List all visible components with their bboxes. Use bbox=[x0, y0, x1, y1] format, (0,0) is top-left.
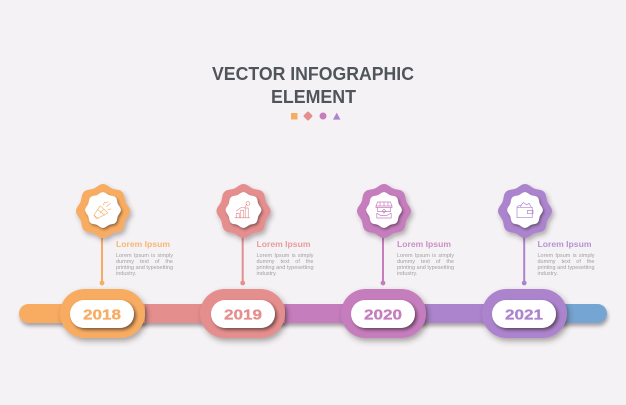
pill 2021: 2021 bbox=[505, 306, 543, 324]
pill 2020 bbox=[341, 289, 426, 338]
icon: growth chart bbox=[235, 202, 250, 218]
body text bbox=[538, 252, 594, 276]
pill 2018: 2018 bbox=[83, 306, 121, 324]
stem and dot bbox=[381, 235, 385, 285]
body text bbox=[256, 252, 314, 276]
bar start: orange bbox=[19, 304, 145, 323]
body text: printing and typesetting bbox=[397, 264, 454, 270]
body text bbox=[397, 252, 454, 276]
body text: industry. bbox=[256, 270, 277, 276]
body text: printing and typesetting bbox=[116, 264, 173, 270]
body text: Lorem Ipsum is simply bbox=[256, 252, 314, 258]
heading: Lorem Ipsum bbox=[538, 239, 591, 249]
body text: Lorem Ipsum is simply bbox=[397, 252, 454, 258]
body text: dummy text of the bbox=[397, 258, 454, 264]
stem and dot bbox=[521, 235, 526, 285]
step 2019 bbox=[216, 184, 314, 286]
bar end: blue bbox=[540, 304, 607, 323]
bar segment: purple bbox=[400, 304, 565, 323]
body text: Lorem Ipsum is simply bbox=[538, 252, 594, 258]
body text: industry. bbox=[397, 270, 417, 276]
heading: Lorem Ipsum bbox=[116, 239, 170, 249]
title bbox=[212, 63, 414, 107]
pill 2020: 2020 bbox=[364, 306, 402, 324]
icon: party popper bbox=[94, 202, 111, 218]
stem and dot bbox=[100, 235, 104, 285]
icon: shop and hand bbox=[376, 202, 392, 218]
title: VECTOR INFOGRAPHIC bbox=[212, 63, 414, 84]
bar segment: pink bbox=[260, 304, 425, 323]
pill 2021 bbox=[482, 289, 567, 338]
body text: dummy text of the bbox=[538, 258, 594, 264]
step 2020 bbox=[356, 184, 454, 286]
flower badge bbox=[357, 184, 411, 238]
step 2021 bbox=[498, 184, 594, 286]
flower badge bbox=[216, 184, 270, 238]
title: ELEMENT bbox=[271, 86, 357, 107]
stem and dot bbox=[240, 235, 245, 285]
timeline bar with year pills bbox=[18, 288, 610, 345]
flower badge bbox=[498, 184, 552, 238]
pill 2019 bbox=[200, 289, 285, 338]
step 2018 bbox=[76, 184, 173, 286]
flower badge bbox=[76, 184, 130, 238]
heading: Lorem Ipsum bbox=[256, 239, 310, 249]
heading: Lorem Ipsum bbox=[397, 239, 451, 249]
pill 2018 bbox=[60, 289, 145, 338]
body text: printing and typesetting bbox=[538, 264, 594, 270]
pill 2019: 2019 bbox=[224, 306, 262, 324]
body text: dummy text of the bbox=[116, 258, 173, 264]
body text: printing and typesetting bbox=[256, 264, 314, 270]
body text: dummy text of the bbox=[256, 258, 314, 264]
body text: industry. bbox=[538, 270, 558, 276]
body text: industry. bbox=[116, 270, 136, 276]
bar segment: salmon bbox=[120, 304, 285, 323]
icon: wallet bbox=[516, 202, 532, 218]
decorative shape row bbox=[291, 112, 340, 120]
body text: Lorem Ipsum is simply bbox=[116, 252, 173, 258]
body text bbox=[116, 252, 173, 276]
